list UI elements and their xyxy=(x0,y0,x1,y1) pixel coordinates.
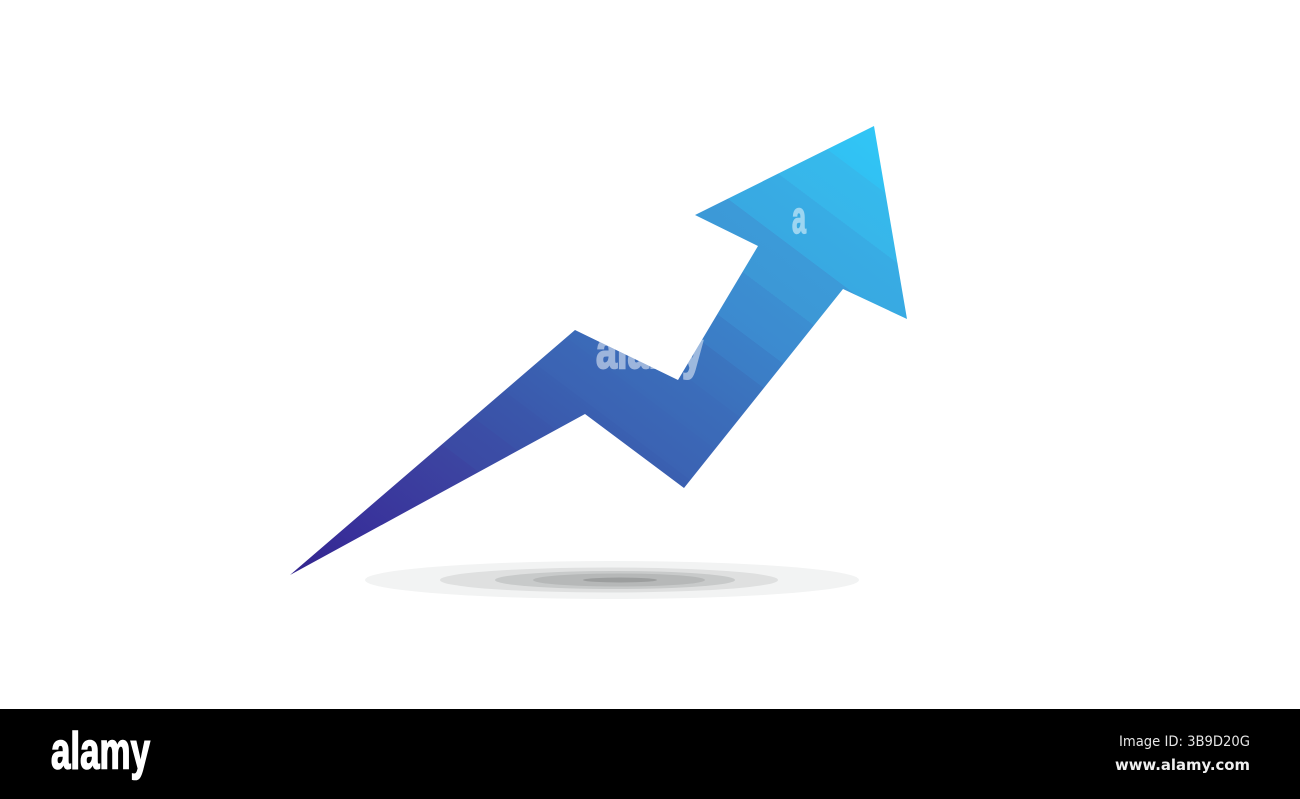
website: www.alamy.com xyxy=(1115,756,1250,774)
footer bar xyxy=(0,709,1300,799)
watermark on arrow: a xyxy=(792,192,807,243)
rising arrow xyxy=(290,126,907,575)
image id: Image ID: 3B9D20G xyxy=(1119,734,1250,750)
watermark on arrow xyxy=(596,192,807,380)
watermark on arrow: alamy xyxy=(596,322,703,380)
ground shadow xyxy=(365,561,859,599)
alamy logo: alamy xyxy=(51,722,150,780)
